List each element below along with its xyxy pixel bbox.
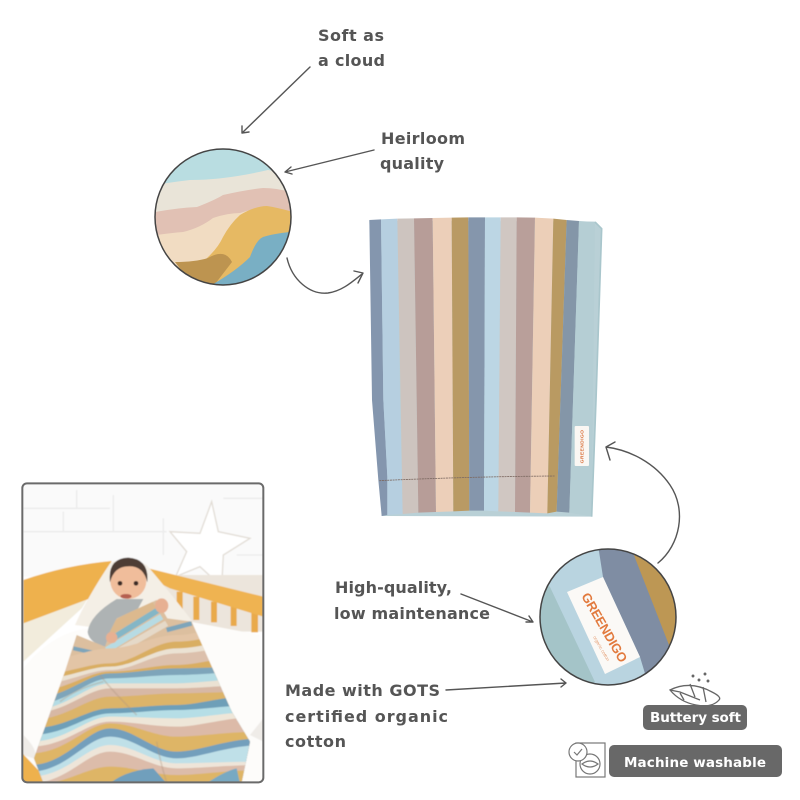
sewn label [575,426,589,466]
star [170,502,250,587]
label: Heirloom quality: quality [380,154,445,173]
badge: Machine washable [609,745,782,777]
sewn label: GREENDIGO [579,430,585,463]
label: Made with GOTS certified organic cotton: cotton [285,732,346,751]
arrow: Soft as a cloud [242,67,310,133]
label: High-quality, low maintenance: low maintenance [334,604,490,623]
label: Soft as a cloud [318,26,385,70]
label: High-quality, low maintenance: High-quality, [335,578,452,597]
label: Made with GOTS certified organic cotton [285,681,448,751]
arrow: curved to blanket label [606,442,679,563]
badge: Buttery soft: Buttery soft [650,710,742,726]
arrow: Heirloom quality [285,150,374,174]
swatch circle: fabric close-up [154,148,292,286]
arrow: curved to blanket [287,258,363,293]
swatch circle: label close-up [539,548,677,686]
arrow: GOTS [446,679,566,690]
badge: Machine washable: Machine washable [624,755,766,771]
label: High-quality, low maintenance [334,578,490,623]
badge: Buttery soft [643,705,747,730]
swatch circle: label close-up: organic cotton [592,635,611,662]
label: Heirloom quality: Heirloom [381,129,465,148]
label: Heirloom quality [380,129,465,173]
label: Made with GOTS certified organic cotton: Made with GOTS [285,681,440,700]
arrow: high-quality [461,594,533,622]
hood [75,562,190,627]
label: Soft as a cloud: a cloud [318,51,385,70]
label: Made with GOTS certified organic cotton: certified organic [285,707,448,726]
crib [164,574,262,632]
swatch circle: label close-up: GREENDIGO [578,590,630,665]
icon: washing machine [569,743,605,777]
lifestyle photo: baby under blanket [22,483,263,785]
blanket with stripes [30,598,263,785]
label: Soft as a cloud: Soft as [318,26,384,45]
mattress [192,622,240,632]
baby [88,599,143,648]
icon: feather [670,673,720,706]
folded blanket product [369,217,602,517]
